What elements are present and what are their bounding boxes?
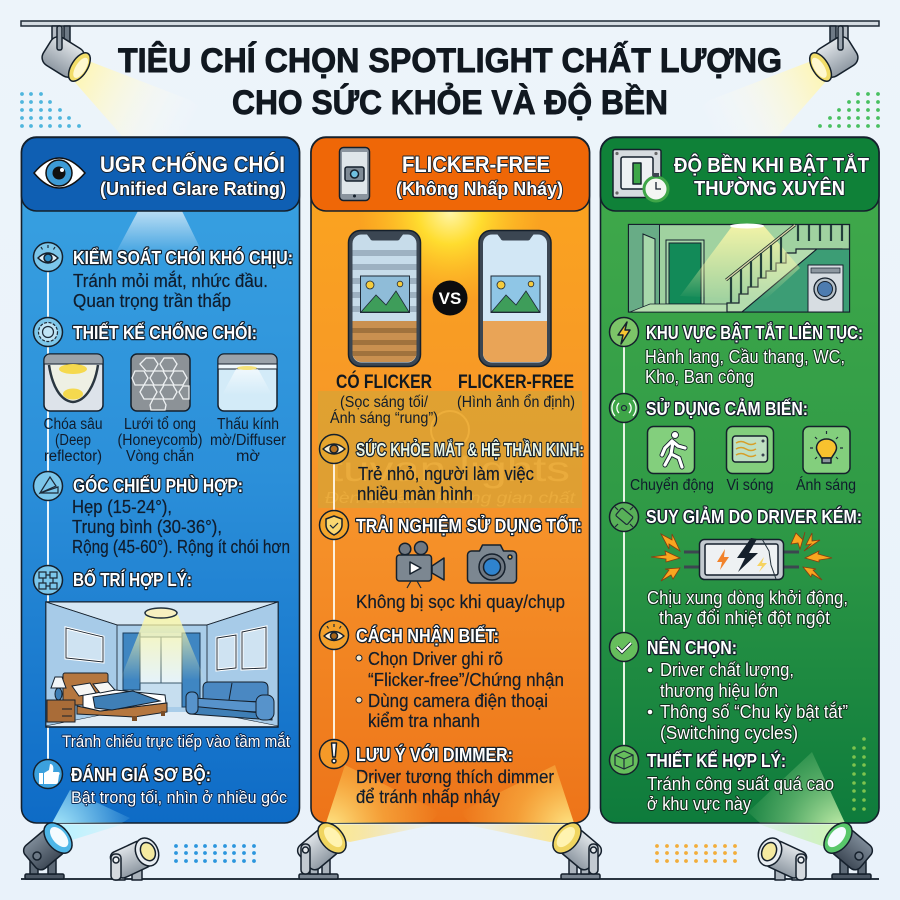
icon: eye scan badge <box>320 620 348 650</box>
title: TIÊU CHÍ CHỌN SPOTLIGHT CHẤT LƯỢNG <box>118 40 782 80</box>
section: góc chiếu phù hợp: Hẹp (15-24°), <box>72 497 172 517</box>
panel background orange <box>311 137 590 823</box>
icon: box badge <box>610 746 638 774</box>
section: khu vực bật tắt: Kho, Ban công <box>645 367 754 387</box>
section: đánh giá sơ bộ: Bật trong tối, nhìn ở nhiều góc <box>71 788 287 807</box>
section: kiểm soát chói: Quan trọng trần thấp <box>73 291 231 311</box>
timeline line green <box>623 342 625 750</box>
icon: shield badge <box>320 510 348 540</box>
section: đánh giá sơ bộ <box>71 764 287 807</box>
icon: lightning badge <box>610 318 638 346</box>
section: nên chọn: Thông số “Chu kỳ bật tắt” <box>660 701 848 722</box>
tile: honeycomb <box>131 354 190 411</box>
section: cách nhận biết: Chọn Driver ghi rõ <box>368 649 503 669</box>
badge: VS <box>432 280 468 316</box>
tile: diffuser <box>218 354 277 411</box>
yellow glow beam <box>358 211 542 306</box>
section: nên chọn: thương hiệu lớn <box>660 681 778 701</box>
icon: video camera <box>396 542 444 588</box>
section: sức khỏe mắt: Trẻ nhỏ, người làm việc <box>358 464 534 484</box>
section: khu vực bật tắt <box>645 322 863 387</box>
phone comparison labels: (Hình ảnh ổn định) <box>457 394 575 411</box>
timeline line orange <box>333 460 335 750</box>
section: góc chiếu phù hợp: Trung bình (30-36°), <box>72 517 222 537</box>
section: lưu ý dimmer: LƯU Ý VỚI DIMMER: <box>356 744 513 765</box>
text: xung dòng khởi động: thay đổi nhiệt đột ngột <box>659 608 830 628</box>
icon: sensor badge <box>610 394 638 422</box>
phone: flicker-free <box>479 230 551 366</box>
timeline line blue <box>47 262 49 774</box>
text: xung dòng khởi động <box>647 588 848 628</box>
floor line <box>21 878 879 880</box>
icon: eye <box>34 158 85 188</box>
panel background blue <box>22 137 300 823</box>
green header title: ĐỘ BỀN KHI BẬT TẮT <box>674 153 869 177</box>
captions: anti-glare designs: Lưới tổ ong <box>124 416 196 433</box>
section: cách nhận biết: kiểm tra nhanh <box>368 711 480 731</box>
section: nên chọn: NÊN CHỌN: <box>647 637 737 658</box>
text: xung dòng khởi động: Chịu xung dòng khởi động, <box>647 588 848 608</box>
section: khu vực bật tắt: Hành lang, Cầu thang, WC, <box>645 347 845 367</box>
captions: anti-glare designs: Chóa sâu <box>44 416 102 433</box>
orange header <box>311 138 590 211</box>
panel: UGR chống chói <box>22 137 300 823</box>
bottom right green beam <box>748 752 845 823</box>
watermark: tuvan lights <box>330 450 570 489</box>
section: góc chiếu phù hợp <box>72 475 290 557</box>
captions: anti-glare designs: mờ/Diffuser <box>210 432 286 449</box>
icon: phone with camera <box>340 148 370 200</box>
section: nên chọn: Driver chất lượng, <box>660 660 794 680</box>
dot pattern: green panel <box>852 737 866 811</box>
dot pattern: bottom orange <box>655 844 737 863</box>
icon: bottom silver spotlight right <box>754 834 809 880</box>
section: sức khỏe mắt: SỨC KHỎE MẮT & HỆ THẦN KINH: <box>356 439 584 460</box>
panel: flicker-free <box>311 137 590 823</box>
section: cách nhận biết: Dùng camera điện thoại <box>368 691 548 711</box>
caption: tránh chiếu trực tiếp: Tránh chiếu trực tiếp vào tầm mắt <box>62 732 290 751</box>
icon: layout badge <box>34 566 62 594</box>
heading: bố trí hợp lý: BỐ TRÍ HỢP LÝ: <box>73 569 192 590</box>
phone: with flicker <box>348 230 420 366</box>
tile: microwave sensor <box>726 426 774 474</box>
green header <box>600 138 879 211</box>
captions: anti-glare designs: reflector) <box>44 448 102 465</box>
badge: VS: VS <box>439 289 461 308</box>
icon: switch and timer <box>613 150 668 201</box>
dot pattern: bottom blue <box>174 844 256 863</box>
phone comparison labels: CÓ FLICKER <box>336 371 432 393</box>
heading: sử dụng cảm biến: SỬ DỤNG CẢM BIẾN: <box>646 398 808 419</box>
icon: check badge <box>610 632 638 662</box>
illustration: damaged driver with sparks <box>651 532 832 581</box>
captions: sensor types: Chuyển động <box>630 477 714 494</box>
section: thiết kế chống chói heading: THIẾT KẾ CHỐNG CHÓI: <box>73 322 257 343</box>
watermark <box>318 391 582 508</box>
section: lưu ý dimmer: Driver tương thích dimmer <box>356 767 554 787</box>
icon: bottom right dark spotlight <box>818 818 877 879</box>
icon: bottom orange spotlight left <box>293 818 352 879</box>
title <box>118 40 782 122</box>
captions: anti-glare designs: mờ <box>236 448 260 465</box>
icon: beam angle badge <box>34 472 62 500</box>
section: kiểm soát chói: KIỂM SOÁT CHÓI KHÓ CHỊU: <box>73 247 293 268</box>
phone comparison labels <box>330 371 575 427</box>
light beam under blue header <box>113 211 205 258</box>
caption: không bị sọc: Không bị sọc khi quay/chụp <box>356 592 565 612</box>
title: CHO SỨC KHỎE VÀ ĐỘ BỀN <box>232 82 668 122</box>
tile: deep reflector <box>44 354 103 411</box>
section: lưu ý dimmer: để tránh nhấp nháy <box>356 787 500 807</box>
icon: photo camera <box>468 545 516 583</box>
section: góc chiếu phù hợp: GÓC CHIẾU PHÙ HỢP: <box>73 475 243 496</box>
icon: eye badge <box>34 242 62 272</box>
phone comparison labels: (Sọc sáng tối/ <box>340 394 429 411</box>
dot pattern: top left <box>20 92 81 128</box>
blue header title: UGR CHỐNG CHÓI <box>100 151 285 177</box>
illustration: hallway and stairs <box>628 224 850 312</box>
section: cách nhận biết: CÁCH NHẬN BIẾT: <box>356 625 499 646</box>
top left light beam <box>72 60 240 136</box>
blue header title <box>100 151 286 199</box>
icon: top left spotlight <box>39 26 95 85</box>
green header title: THƯỜNG XUYÊN <box>694 176 845 200</box>
icon: sun badge <box>34 318 62 346</box>
icon: bottom left dark spotlight <box>19 818 78 879</box>
section: cách nhận biết <box>356 625 564 731</box>
panel: độ bền khi bật tắt <box>600 137 879 823</box>
captions: anti-glare designs <box>44 416 286 465</box>
section: thiết kế hợp lý <box>647 750 834 814</box>
bottom left orange beam <box>326 765 440 823</box>
section: đánh giá sơ bộ: ĐÁNH GIÁ SƠ BỘ: <box>71 764 211 785</box>
captions: anti-glare designs: Vòng chắn <box>126 448 194 465</box>
section: nên chọn <box>647 637 848 743</box>
section: sức khỏe mắt: nhiều màn hình <box>357 484 473 504</box>
section: khu vực bật tắt: KHU VỰC BẬT TẮT LIÊN TỤC: <box>646 322 863 343</box>
heading: suy giảm do driver kém: SUY GIẢM DO DRIVER KÉM: <box>646 506 862 527</box>
light beam from bottom left lamp <box>52 790 130 823</box>
green header title <box>674 153 869 200</box>
icon: top right spotlight <box>805 26 861 85</box>
blue header <box>22 138 300 211</box>
light spill below panels <box>52 824 846 846</box>
icon: bottom orange spotlight right <box>547 818 606 879</box>
section: thiết kế hợp lý: Tránh công suất quá cao <box>647 774 834 794</box>
icon: bottom silver spotlight left <box>108 834 163 880</box>
phone comparison labels: Ánh sáng “rung”) <box>330 410 438 427</box>
tile: motion sensor <box>648 426 694 474</box>
orange header title <box>396 152 563 199</box>
captions: sensor types <box>630 477 856 494</box>
section: thiết kế hợp lý: THIẾT KẾ HỢP LÝ: <box>647 750 786 771</box>
captions: anti-glare designs: (Honeycomb) <box>118 432 202 449</box>
watermark: Đèn chuẩn - Không gian chất <box>325 489 576 507</box>
section: kiểm soát chói <box>73 247 293 311</box>
icon: warning badge <box>320 740 348 768</box>
blue header title: (Unified Glare Rating) <box>100 179 286 199</box>
orange header title: (Không Nhấp Nháy) <box>396 179 563 199</box>
section: lưu ý dimmer <box>356 744 554 807</box>
captions: anti-glare designs: (Deep <box>55 432 91 449</box>
icon: thumbs up badge <box>34 760 62 788</box>
phone comparison labels: FLICKER-FREE <box>458 372 574 393</box>
section: thiết kế hợp lý: ở khu vực này <box>647 794 751 814</box>
section: sức khỏe mắt <box>356 439 584 504</box>
captions: anti-glare designs: Thấu kính <box>217 416 279 433</box>
section: kiểm soát chói: Tránh mỏi mắt, nhức đầu. <box>73 270 268 291</box>
orange header title: FLICKER-FREE <box>402 152 550 177</box>
captions: sensor types: Ánh sáng <box>796 477 856 494</box>
section: góc chiếu phù hợp: Rộng (45-60°). Rộng ít chói hơn <box>72 537 290 557</box>
section: cách nhận biết: “Flicker-free”/Chứng nhận <box>368 670 564 690</box>
captions: sensor types: Vi sóng <box>726 477 774 494</box>
section: nên chọn: (Switching cycles) <box>660 723 798 743</box>
heading: trải nghiệm: TRẢI NGHIỆM SỬ DỤNG TỐT: <box>356 515 582 536</box>
dot pattern: top right <box>818 92 880 128</box>
tile: light sensor <box>803 426 850 474</box>
panel background green <box>600 137 879 823</box>
icon: broken driver badge <box>610 502 638 532</box>
illustration: bedroom <box>46 602 278 727</box>
icon: eye badge orange <box>320 434 348 464</box>
bottom right orange beam <box>460 765 574 823</box>
top right light beam <box>660 60 828 136</box>
ceiling track rail <box>21 21 879 26</box>
